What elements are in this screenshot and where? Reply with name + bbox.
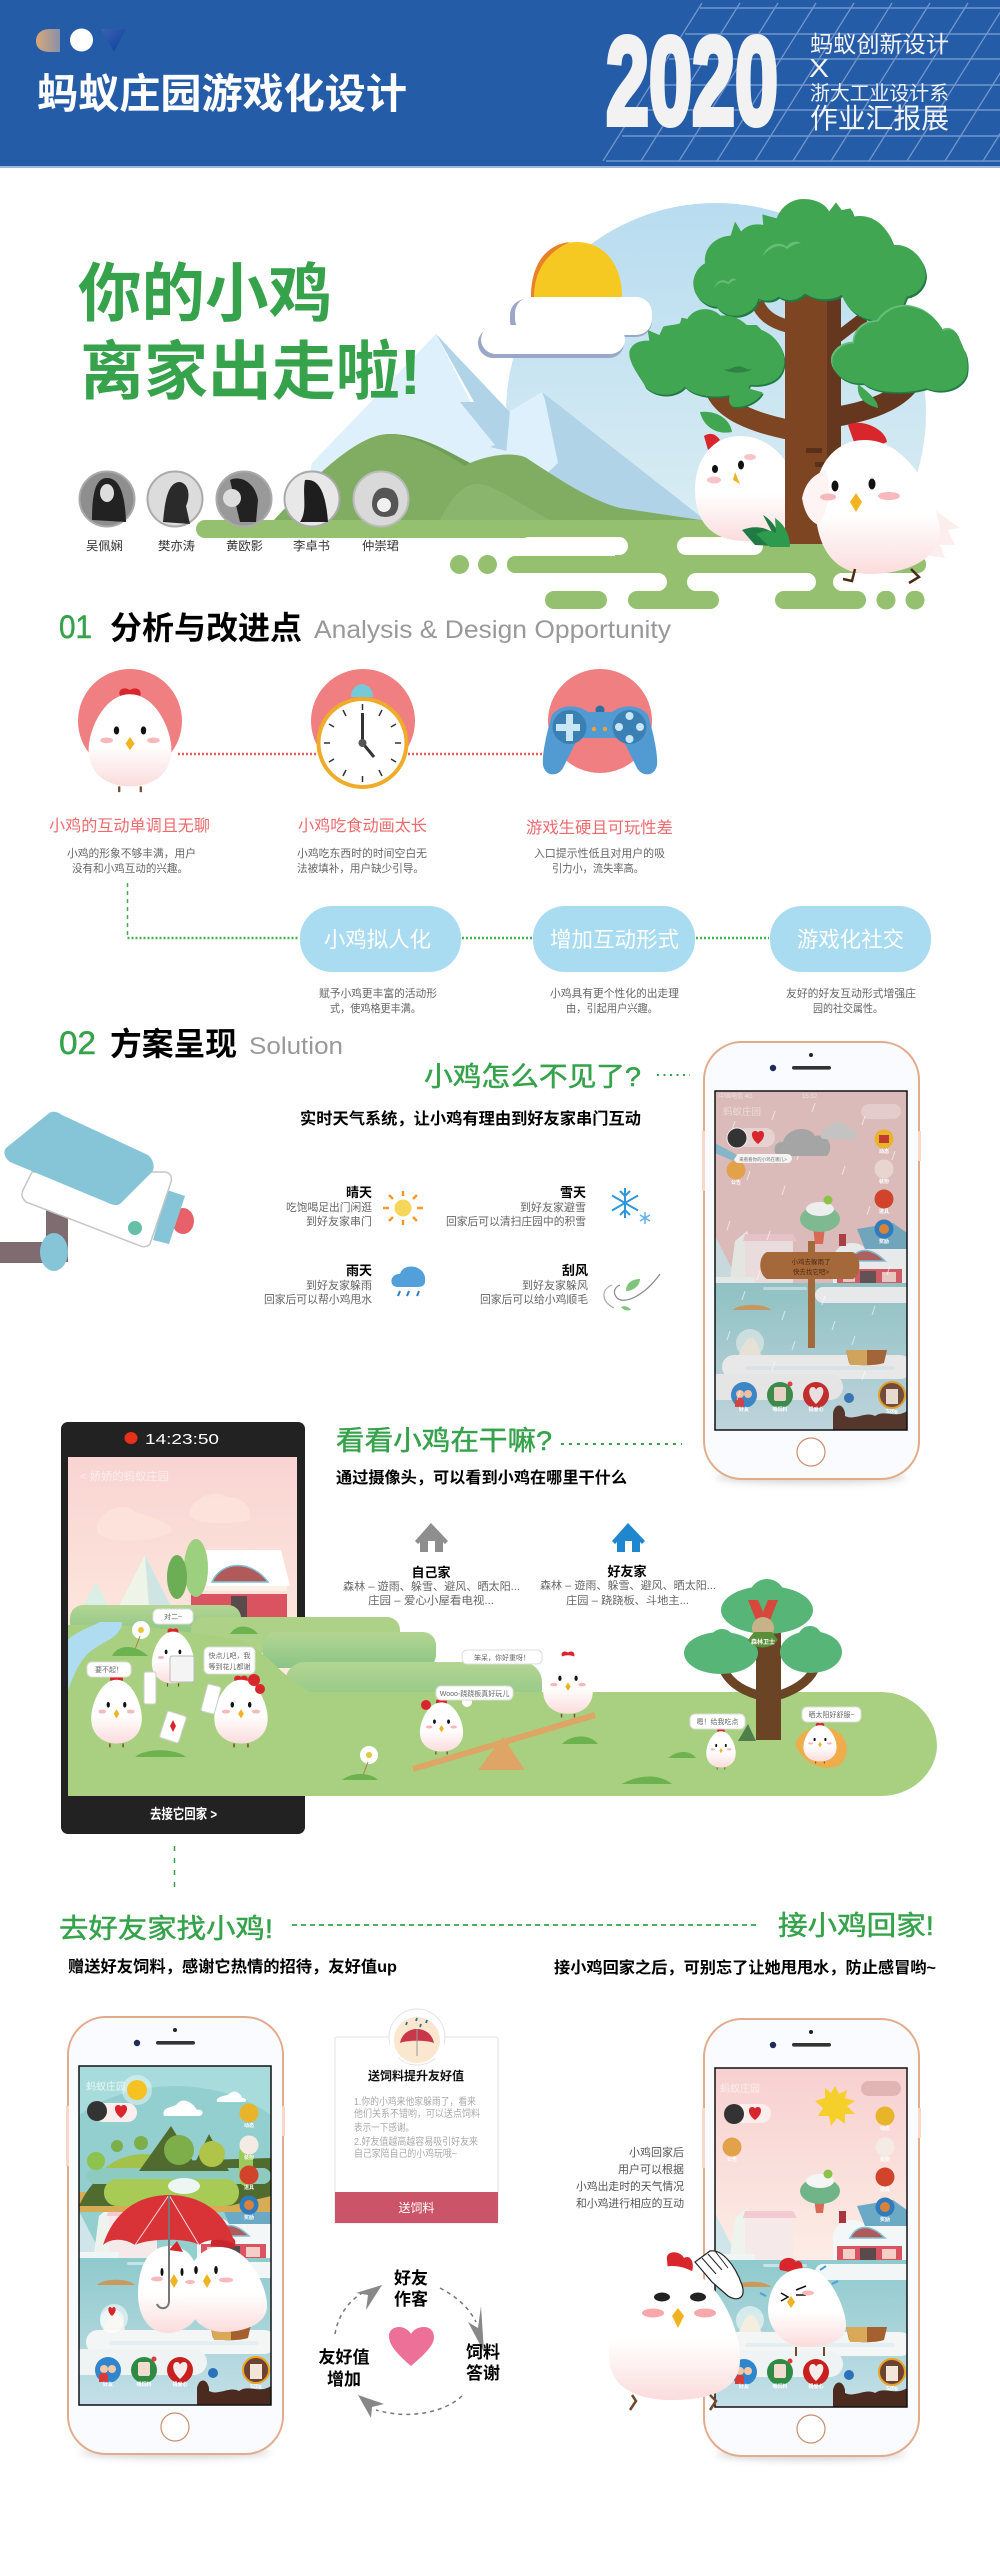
left canopy xyxy=(629,309,785,409)
cycle labels: 答谢 xyxy=(466,2363,500,2383)
own home column: 森林 – 遊雨、躲雪、避风、晒太阳... xyxy=(343,1579,520,1593)
sunbathing chick: 晒太阳好舒服~ xyxy=(808,1710,855,1719)
recording indicator: 14:23:50 xyxy=(145,1431,219,1448)
section 02 heading: Solution xyxy=(249,1033,343,1060)
exhibition title xyxy=(809,31,949,134)
problem 2: 法被填补，用户缺少引导。 xyxy=(297,861,424,875)
weather subtitle: 实时天气系统，让小鸡有理由到好友家串门互动 xyxy=(300,1109,641,1128)
weather: wind xyxy=(480,1263,660,1310)
problem 3: 引力小，流失率高。 xyxy=(552,861,644,875)
screen content xyxy=(705,2068,915,2407)
mini camera xyxy=(715,1143,737,1161)
team avatars xyxy=(80,472,408,526)
ground stripes xyxy=(196,520,926,610)
screen content: 喂饲料 xyxy=(772,2383,788,2390)
problem 3: 入口提示性低且对用户的吸 xyxy=(534,846,665,860)
problem 1: 没有和小鸡互动的兴趣。 xyxy=(72,861,188,875)
solution texts: 由，引起用户兴趣。 xyxy=(566,1001,658,1015)
right chick xyxy=(802,423,960,583)
pill 2: 增加互动形式 xyxy=(550,928,679,952)
weather: wind: 回家后可以给小鸡顺毛 xyxy=(480,1292,588,1306)
own home column: 庄园 – 爱心小屋看电视... xyxy=(368,1593,494,1607)
exhibition title: 蚂蚁创新设计 xyxy=(810,31,949,57)
team names: 李卓书 xyxy=(293,538,330,553)
card body: 自己家陪自己的小鸡玩哦~ xyxy=(354,2147,457,2160)
weather: snow: 回家后可以清扫庄园中的积雪 xyxy=(446,1214,586,1228)
solution pills xyxy=(300,906,931,972)
exhibition title: 浙大工业设计系 xyxy=(810,82,949,105)
problem 1 xyxy=(49,817,210,875)
monitor screen xyxy=(68,1457,297,1796)
small chick shaking water xyxy=(760,2258,846,2356)
sun xyxy=(531,242,622,297)
hero title: 你的小鸡 xyxy=(78,258,332,330)
back-home note: 和小鸡进行相应的互动 xyxy=(576,2196,684,2210)
seesaw xyxy=(413,1715,595,1770)
screen content: 520g xyxy=(250,2384,262,2390)
weather: rain xyxy=(264,1263,425,1306)
hero title: 离家出走啦! xyxy=(80,336,421,408)
weather: wind: 刮风 xyxy=(562,1263,588,1278)
solution texts: 赋予小鸡更丰富的活动形 xyxy=(319,986,437,1000)
problem 2 xyxy=(297,817,427,875)
small chick: 嗯！给我吃点 xyxy=(696,1717,738,1726)
team names: 吴佩娴 xyxy=(86,538,123,553)
tree xyxy=(814,2204,824,2213)
screen content: 520g xyxy=(886,2386,898,2392)
friend home column: 庄园 – 跷跷板、斗地主... xyxy=(566,1593,689,1607)
cycle arrows xyxy=(335,2288,476,2414)
cloud xyxy=(478,297,652,358)
leaves xyxy=(700,412,732,433)
header banner xyxy=(0,0,1000,168)
exhibition title: 作业汇报展 xyxy=(810,103,949,134)
avatar heart xyxy=(738,2104,771,2123)
forest xyxy=(79,2126,271,2212)
red connector xyxy=(178,753,545,755)
go home button: 去接它回家 > xyxy=(150,1806,217,1822)
sky circle xyxy=(506,203,926,516)
dashed link xyxy=(292,1924,760,1926)
recording indicator xyxy=(124,1431,219,1448)
problem 3: 游戏生硬且可玩性差 xyxy=(526,819,673,837)
cycle labels xyxy=(318,2269,500,2389)
card chick right: 等到花儿都谢 xyxy=(208,1662,250,1671)
camera subtitle: 通过摄像头，可以看到小鸡在哪里干什么 xyxy=(336,1468,627,1487)
card body: 表示一下感谢。 xyxy=(354,2121,414,2134)
pill 3 xyxy=(770,906,931,972)
logo shapes xyxy=(36,28,126,52)
weather: wind: 到好友家躲风 xyxy=(522,1278,588,1292)
icon: gray house xyxy=(415,1523,448,1552)
solution texts: 园的社交属性。 xyxy=(813,1001,883,1015)
problem 1: 小鸡的互动单调且无聊 xyxy=(49,817,210,835)
screen content: 公告 xyxy=(731,1179,741,1186)
phone 2: umbrella xyxy=(66,2016,285,2462)
section 01 heading xyxy=(59,609,672,646)
phone 1: rainy day xyxy=(702,1042,921,1483)
solution texts: 友好的好友互动形式增强庄 xyxy=(786,986,916,1000)
screen content: 小鸡去躲雨了 xyxy=(792,1257,830,1266)
screen content: 喂饲料 xyxy=(136,2381,152,2388)
heading: bring chick home: 接小鸡回家! xyxy=(778,1911,934,1941)
heart xyxy=(389,2327,434,2366)
main title: 蚂蚁庄园游戏化设计 xyxy=(37,71,407,117)
problem texts xyxy=(49,817,673,875)
feed button: 送饲料 xyxy=(398,2200,435,2215)
avatar heart xyxy=(98,2103,137,2122)
screen content: 快去找它吧> xyxy=(793,1267,829,1276)
pill 2 xyxy=(533,906,695,972)
side buttons xyxy=(722,2138,742,2156)
screen content: 动态 xyxy=(244,2122,254,2129)
weather: snow: 到好友家避雪 xyxy=(520,1200,586,1214)
screen content: 来看看你的小鸡在哪儿> xyxy=(739,1156,787,1163)
screen content: 装扮 xyxy=(244,2154,254,2161)
weather items xyxy=(264,1185,660,1310)
green connector xyxy=(126,883,128,938)
grass tuft xyxy=(742,515,790,547)
card body: 他们关系不错哟，可以送点饲料 xyxy=(354,2107,480,2120)
petting hand xyxy=(695,2251,743,2299)
side buttons xyxy=(726,1160,746,1180)
monitor back label: < 娇娇的蚂蚁庄园 xyxy=(80,1469,169,1483)
friend home column xyxy=(540,1523,716,1607)
status bar and title: 中国电信 4G xyxy=(719,1092,753,1100)
right canopy xyxy=(831,305,969,394)
weather: sunny xyxy=(286,1185,423,1228)
screen content: 捐爱心 xyxy=(808,1406,824,1413)
screen content: 道具 xyxy=(880,2186,890,2193)
card badge xyxy=(389,2009,445,2065)
problem 2: 小鸡吃东西时的时间空白无 xyxy=(297,846,427,860)
connector down xyxy=(174,1846,176,1894)
weather: snow: 雪天 xyxy=(560,1185,586,1200)
monitor scenery xyxy=(75,1494,290,1620)
seesaw chick left xyxy=(420,1686,513,1755)
screen content: 奖励 xyxy=(880,2216,890,2223)
cycle labels: 友好值 xyxy=(318,2348,370,2367)
top canopy xyxy=(693,199,927,322)
tree xyxy=(814,1231,824,1244)
screen content: 动态 xyxy=(880,2125,890,2132)
card chick left xyxy=(87,1662,156,1747)
screen content: 蚂蚁庄园 xyxy=(723,1106,761,1118)
friend home column: 好友家 xyxy=(607,1564,647,1579)
screen content: 公告 xyxy=(727,2156,737,2163)
mountains xyxy=(300,334,705,520)
signpost xyxy=(808,1241,815,1348)
problem 3 xyxy=(526,819,673,875)
heading: find chick at friend: 去好友家找小鸡! xyxy=(59,1914,273,1944)
screen content: 奖励 xyxy=(879,1238,889,1245)
rain clouds xyxy=(774,1129,830,1156)
card body: 2.好友值越高越容易吸引好友来 xyxy=(354,2135,478,2148)
bottom buttons labels: 好友 xyxy=(739,1406,749,1413)
seesaw chick left: Wooo-跷跷板真好玩儿 xyxy=(440,1689,509,1698)
feed card: 送饲料提升友好值 xyxy=(368,2068,464,2083)
solution texts xyxy=(319,986,916,1015)
seesaw chick right xyxy=(462,1650,593,1717)
weather: sunny: 吃饱喝足出门闲逛 xyxy=(286,1200,372,1214)
screen content: 15:32 xyxy=(802,1094,818,1100)
cycle labels: 作客 xyxy=(394,2289,428,2309)
screen content: 捐爱心 xyxy=(172,2381,188,2388)
heading: what is the chick doing: 看看小鸡在干嘛? xyxy=(336,1426,552,1456)
rain xyxy=(727,1103,895,1400)
heading: where is the chick: 小鸡怎么不见了? xyxy=(424,1062,641,1092)
weather: rain: 到好友家躲雨 xyxy=(306,1278,372,1292)
team names: 仲崇珺 xyxy=(362,539,399,553)
screen content: 装扮 xyxy=(879,1178,889,1185)
tree snow xyxy=(168,2178,200,2194)
sun xyxy=(815,2086,855,2126)
icon: blue house xyxy=(612,1523,645,1552)
screen content: 奖励 xyxy=(244,2214,254,2221)
year 2020: 2020 xyxy=(606,13,778,151)
hero illustration xyxy=(196,199,969,623)
pill 1 xyxy=(300,906,461,972)
tree with medal: 森林卫士 xyxy=(751,1638,775,1646)
feed card xyxy=(335,2009,498,2223)
back-home note xyxy=(576,2145,684,2210)
section 02 heading: 02 xyxy=(59,1025,96,1061)
bottom button labels: 好友 xyxy=(103,2381,113,2388)
grid pattern xyxy=(603,3,1000,161)
chicks under umbrella xyxy=(138,2236,267,2333)
problem 2: 小鸡吃食动画太长 xyxy=(298,817,427,835)
small chick xyxy=(690,1714,745,1770)
exhibition title: X xyxy=(809,53,829,83)
screen content: 道具 xyxy=(879,1208,889,1215)
weather: rain: 雨天 xyxy=(346,1263,372,1278)
screen content xyxy=(80,2066,270,2404)
green hills xyxy=(274,434,701,520)
screen content: 520g xyxy=(886,1409,898,1415)
pill 3: 游戏化社交 xyxy=(797,928,904,952)
left chick behind tree xyxy=(695,434,800,541)
screen content xyxy=(705,1091,915,1430)
sunbathing chick xyxy=(796,1707,861,1768)
daisy and grass xyxy=(112,1621,696,1784)
grass by tree xyxy=(738,1724,756,1741)
friendship cycle xyxy=(318,2269,500,2418)
section 02 heading xyxy=(59,1025,343,1062)
monitor chicks and bubbles xyxy=(87,1579,861,1784)
subtitle right: 接小鸡回家之后，可别忘了让她甩甩水，防止感冒哟~ xyxy=(554,1958,936,1977)
sun xyxy=(122,2075,152,2105)
back-home note: 小鸡出走时的天气情况 xyxy=(576,2179,684,2193)
team names: 樊亦涛 xyxy=(158,538,195,553)
title and side buttons: 蚂蚁庄园 xyxy=(86,2080,126,2093)
avatar and hearts xyxy=(742,1128,775,1147)
tree with medal xyxy=(684,1579,842,1740)
screen content: 动态 xyxy=(879,1148,889,1155)
own home column: 自己家 xyxy=(411,1565,451,1580)
own home column xyxy=(343,1523,520,1607)
cycle labels: 饲料 xyxy=(466,2343,500,2362)
green pills ground xyxy=(68,1605,937,1796)
red umbrella xyxy=(103,2195,235,2308)
camera monitor xyxy=(61,1422,305,1834)
card chick right xyxy=(201,1647,268,1747)
section 01 heading: 分析与改进点 xyxy=(110,610,302,646)
hero title xyxy=(78,258,421,408)
team names xyxy=(86,538,399,553)
weather: snow xyxy=(446,1185,650,1228)
feed button xyxy=(335,2192,498,2223)
tree xyxy=(629,199,969,544)
cycle labels: 增加 xyxy=(327,2370,361,2389)
card chick right: 快点儿吧，我 xyxy=(208,1651,250,1660)
phone 3: back home xyxy=(702,2019,921,2460)
icon: surveillance camera xyxy=(0,1112,194,1271)
solution texts: 式，使鸡格更丰满。 xyxy=(330,1001,421,1015)
section 01 heading: 01 xyxy=(59,609,92,645)
playing card xyxy=(159,1711,187,1743)
reward xyxy=(100,2310,124,2330)
card body xyxy=(354,2095,480,2160)
seesaw chick right: 笨呆，你好重呀！ xyxy=(474,1653,530,1662)
clouds xyxy=(164,2101,203,2116)
icon: clock xyxy=(311,669,415,787)
icon: chick xyxy=(78,669,182,792)
card chick left: 要不起！ xyxy=(95,1666,123,1674)
weather: sunny: 晴天 xyxy=(346,1185,372,1200)
team names: 黄欧影 xyxy=(226,539,263,553)
section 01 heading: Analysis & Design Opportunity xyxy=(314,616,672,644)
screen content: 道具 xyxy=(244,2184,254,2191)
speech bubble xyxy=(734,1154,792,1163)
problem 1: 小鸡的形象不够丰满，用户 xyxy=(67,846,196,860)
screen content: 喂饲料 xyxy=(772,1406,788,1413)
title: 蚂蚁庄园 xyxy=(720,2082,760,2095)
pill 1: 小鸡拟人化 xyxy=(324,928,431,952)
subtitle left: 赠送好友饲料，感谢它热情的招待，友好值up xyxy=(68,1957,397,1976)
cycle labels: 好友 xyxy=(394,2269,428,2288)
weather: rain: 回家后可以帮小鸡甩水 xyxy=(264,1292,372,1306)
section 02 heading: 方案呈现 xyxy=(110,1026,237,1062)
back-home note: 用户可以根据 xyxy=(618,2162,684,2176)
card chick top: 对二~ xyxy=(164,1612,182,1621)
screen content: 捐爱心 xyxy=(808,2383,824,2390)
weather: sunny: 到好友家串门 xyxy=(306,1214,372,1228)
card chick top xyxy=(152,1609,194,1687)
card body: 1.你的小鸡来他家躲雨了，看来 xyxy=(354,2095,476,2108)
solution texts: 小鸡具有更个性化的出走理 xyxy=(550,986,679,1000)
bottom button labels: 好友 xyxy=(739,2383,749,2390)
icon: game controller xyxy=(543,669,657,774)
friend home column: 森林 – 遊雨、躲雪、避风、晒太阳... xyxy=(540,1578,716,1592)
screen content: 装扮 xyxy=(880,2156,890,2163)
big chick with petting hand xyxy=(609,2251,743,2410)
back-home note: 小鸡回家后 xyxy=(629,2145,684,2159)
